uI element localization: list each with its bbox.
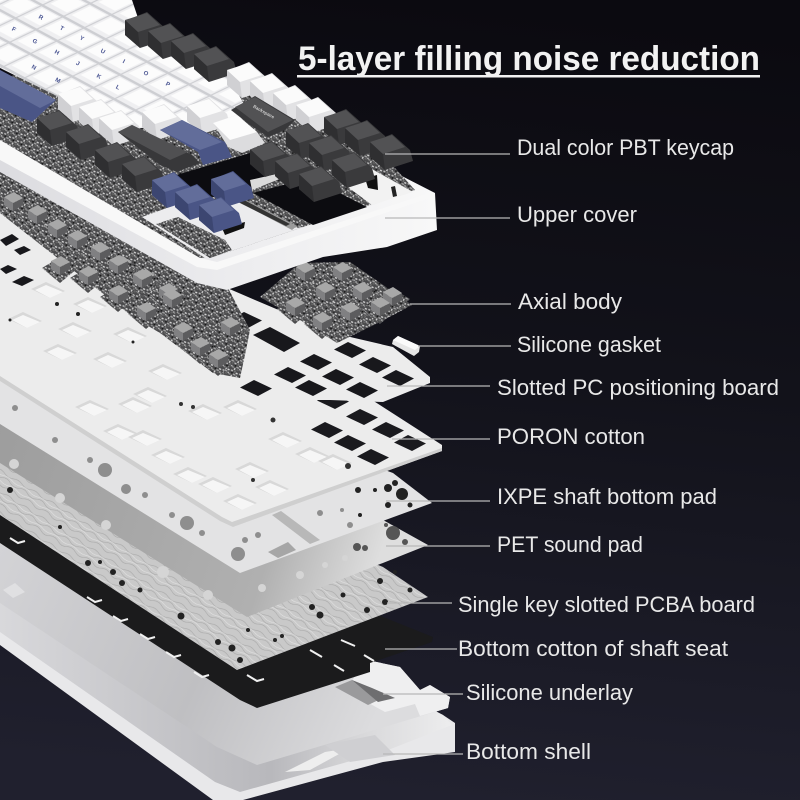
label: silicone gasket: Silicone gasket <box>517 332 661 357</box>
cover opening <box>0 30 415 258</box>
keycaps: Y <box>78 36 85 43</box>
keycaps <box>0 0 413 233</box>
layer: single key slotted PCBA board <box>0 400 428 670</box>
dark left keys <box>37 110 80 146</box>
layer: PORON cotton <box>0 230 442 527</box>
layer: bottom cotton of shaft seat <box>0 420 433 708</box>
keycaps: G <box>31 38 38 46</box>
label: dual color PBT keycap: Dual color PBT keycap <box>517 135 734 160</box>
layer: PET sound pad <box>0 360 428 617</box>
label: PET sound pad: PET sound pad <box>497 532 643 557</box>
layer: slotted PC positioning board <box>0 190 430 403</box>
label: slotted PC positioning board: Slotted PC positioning board <box>497 375 779 400</box>
keycaps: N <box>30 64 37 72</box>
label: bottom cotton of shaft seat: Bottom cotton of shaft seat <box>458 636 728 661</box>
layer: axial body switches <box>0 165 412 378</box>
label: bottom shell: Bottom shell <box>466 739 591 764</box>
white inner panels <box>142 190 415 258</box>
keycaps: M <box>54 77 61 85</box>
keycaps: J <box>75 61 80 68</box>
keycaps: H <box>53 49 60 57</box>
keycaps: O <box>142 70 149 78</box>
keycaps: I <box>121 59 126 65</box>
white keycap field <box>0 0 250 130</box>
layer: bottom shell <box>0 480 455 800</box>
blue space bar <box>0 70 56 122</box>
blue arrow keys <box>152 172 195 208</box>
black panel <box>253 178 367 225</box>
white enter key <box>213 115 265 153</box>
keycaps: Backspace <box>252 104 276 120</box>
silicone gasket <box>392 336 420 356</box>
keycaps: K <box>95 73 102 81</box>
layer: IXPE shaft bottom pad <box>0 330 432 573</box>
keycaps: U <box>99 48 106 56</box>
keycaps: F <box>10 27 17 34</box>
keycaps: T <box>58 26 65 33</box>
keycaps: P <box>164 82 171 89</box>
label: silicone underlay: Silicone underlay <box>466 680 633 705</box>
label: upper cover: Upper cover <box>517 202 637 227</box>
label: single key slotted PCBA board: Single key slotted PCBA board <box>458 592 755 617</box>
dark nav keys <box>324 109 367 145</box>
label: IXPE shaft bottom pad: IXPE shaft bottom pad <box>497 484 717 509</box>
layer: silicone underlay <box>0 460 450 765</box>
keycaps: L <box>114 85 121 92</box>
blue wide key <box>160 120 232 165</box>
label: axial body: Axial body <box>518 289 622 314</box>
layer: upper cover <box>0 30 437 290</box>
label: PORON cotton: PORON cotton <box>497 424 645 449</box>
slider <box>235 198 297 230</box>
dark function keys <box>125 12 168 48</box>
bottom row white <box>58 86 101 122</box>
title: 5-layer filling noise reduction <box>298 40 760 78</box>
backspace key <box>231 96 295 137</box>
key legends: R <box>37 14 44 22</box>
